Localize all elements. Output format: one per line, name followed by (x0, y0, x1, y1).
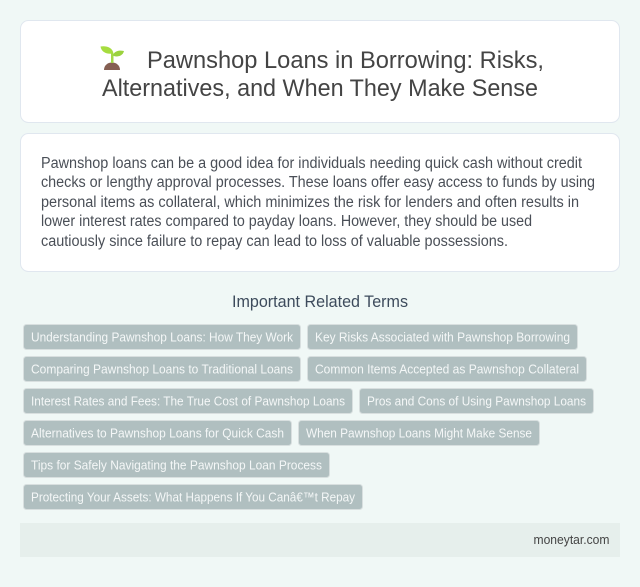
summary text: personal items as collateral, which minimizes the risk for lenders and often results in (41, 194, 579, 211)
tag: protecting assets: Protecting Your Assets: What Happens If You Canâ€™t Repay (31, 490, 355, 504)
tag: key risks: Key Risks Associated with Pawnshop Borrowing (315, 330, 570, 344)
tag: comparing: Comparing Pawnshop Loans to Traditional Loans (31, 362, 293, 376)
title (102, 47, 544, 102)
tag: understanding: Understanding Pawnshop Loans: How They Work (31, 330, 293, 344)
tag: alternatives: Alternatives to Pawnshop Loans for Quick Cash (31, 426, 284, 440)
tag: interest rates (24, 388, 352, 414)
title: Pawnshop Loans in Borrowing: Risks, (147, 47, 544, 74)
tag: pros and cons (360, 388, 594, 414)
tag: when it makes sense (298, 420, 540, 446)
tag: common items: Common Items Accepted as Pawnshop Collateral (315, 362, 579, 376)
summary text: Pawnshop loans can be a good idea for individuals needing quick cash without credit (41, 155, 583, 172)
tag: interest rates: Interest Rates and Fees: The True Cost of Pawnshop Loans (31, 394, 345, 408)
footer: moneytar.com (534, 532, 610, 547)
summary text: checks or lengthy approval processes. These loans offer easy access to funds by using (41, 174, 595, 191)
tag: common items (308, 356, 586, 382)
title: Alternatives, and When They Make Sense (102, 75, 538, 102)
panel: summary card (20, 134, 620, 272)
tag: tips: Tips for Safely Navigating the Pawnshop Loan Process (31, 458, 322, 472)
icon: sprout (100, 46, 124, 70)
tag: tips (24, 452, 330, 478)
tag list (24, 324, 594, 510)
footer (20, 523, 620, 557)
summary text (41, 155, 595, 250)
tag: comparing (24, 356, 300, 382)
tag: key risks (308, 324, 578, 350)
tag: when it makes sense: When Pawnshop Loans Might Make Sense (306, 426, 532, 440)
tag: alternatives (24, 420, 292, 446)
heading: important related terms: Important Related Terms (232, 293, 408, 311)
tag: understanding (24, 324, 300, 350)
panel: title card (20, 20, 620, 122)
tag: protecting assets (24, 484, 362, 510)
tag: pros and cons: Pros and Cons of Using Pawnshop Loans (367, 394, 586, 408)
summary text: cautiously since failure to repay can lead to loss of valuable possessions. (41, 233, 508, 250)
summary text: lower interest rates compared to payday loans. However, they should be used (41, 213, 532, 230)
